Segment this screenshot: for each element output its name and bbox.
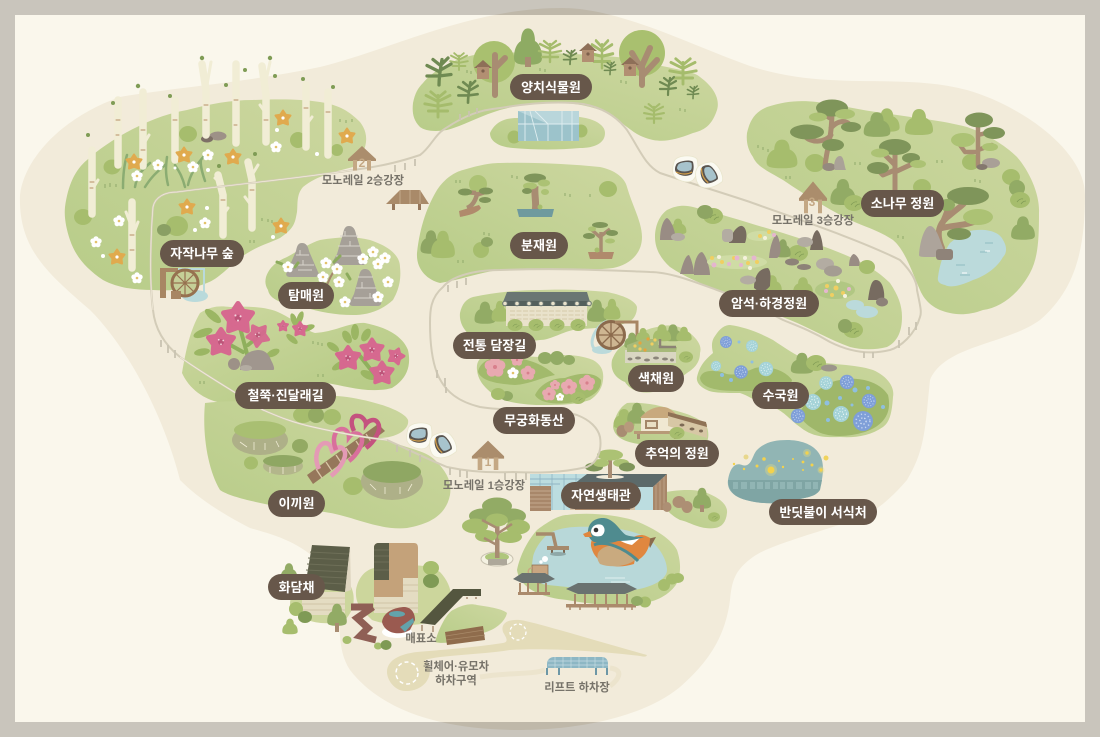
hydrangea blooms [720,336,732,348]
ferns [427,58,451,85]
grass ticks [200,341,323,384]
text: wheelchair and stroller drop-off [423,659,490,687]
monorail station 3: 모노레일 3승강장 [772,213,855,227]
pine bushes [767,108,1020,195]
label: rose of sharon hill: 무궁화동산 [504,413,564,428]
panel: plum garden [265,226,400,315]
text: wheelchair and stroller drop-off: 하차구역 [435,674,477,687]
panel: bonsai garden [417,163,642,283]
monorail station 1: 1 [485,455,492,469]
label: azalea road: 철쭉·진달래길 [247,388,324,403]
birdhouses [474,60,492,79]
monorail track [151,103,921,480]
label: colour garden: 색채원 [638,371,674,386]
rest pavilion [386,190,429,210]
broadleaf trees [473,28,665,95]
ticket office [382,607,415,638]
birch trunks [92,62,328,268]
brick zigzag path [351,607,376,640]
panel: rock and summer garden [655,205,902,349]
lift platform [547,657,608,675]
pond bushes [639,573,684,608]
bonsai two [517,174,554,217]
bushes [74,126,343,236]
thatched house [634,407,707,439]
monorail station 1: 모노레일 1승강장 [443,478,526,492]
stone towers [286,226,381,306]
monorail trains upper [673,156,725,192]
mandarin duck [583,518,656,582]
label: firefly habitat [769,499,877,525]
track posts [161,108,916,393]
mauve rocks [660,218,860,275]
label: birch forest: 자작나무 숲 [170,246,234,261]
tiered flower bed [625,337,677,363]
monorail station 3 [772,181,855,227]
white flowers [90,141,282,283]
monorail station 2: 모노레일 2승강장 [322,173,405,187]
left building [302,545,351,615]
label: pine garden: 소나무 정원 [871,196,934,211]
wood deck [445,626,485,645]
panel: fern garden [413,28,718,141]
pond [938,230,1006,286]
grey rocks [671,229,842,284]
panel: greenhouse [490,111,605,150]
label: rock and summer garden: 암석·하경정원 [731,296,807,311]
label: fern garden: 양치식물원 [521,80,581,95]
birch leaves [86,56,335,168]
watermill [592,322,637,354]
moss bushes [244,407,363,495]
label: hydrangea garden [752,382,809,409]
ecology centre building [530,450,667,511]
monorail station 3: 3 [809,195,816,209]
label: hwadamchae [268,574,325,600]
label: hanok wall road: 전통 담장길 [463,338,526,353]
pavilion small [513,573,555,595]
pine trees [805,110,992,248]
pond water [532,527,667,591]
label: moss garden [268,490,325,517]
label: plum garden: 탐매원 [288,288,324,303]
label: hydrangea garden: 수국원 [763,388,798,403]
greenhouse building [518,111,579,141]
panel: ecology centre grounds [530,450,727,528]
bottom drop-off area [387,589,647,691]
label: firefly habitat: 반딧불이 서식처 [779,505,867,520]
grass ticks [456,175,590,263]
pine rocks [822,156,1000,260]
panel: hwadamchae buildings [281,543,451,650]
water wheel [160,268,208,302]
heart bridge [307,416,385,484]
grass ticks [758,145,980,239]
panel: azalea road [182,304,409,403]
drop-off road [387,620,647,691]
panel: moss garden [204,396,450,528]
panel: firefly habitat [728,440,828,503]
label: moss garden: 이끼원 [279,496,314,511]
label: memory garden: 추억의 정원 [645,446,709,461]
panel: hydrangea garden [697,325,893,437]
azalea rocks [240,350,274,370]
small pond [846,300,864,310]
building trees and bushes [281,561,439,650]
orange flowers [276,110,290,124]
text: wheelchair and stroller drop-off: 휠체어·유모차 [423,659,490,673]
azalea leaves [192,307,377,382]
rocks [210,132,226,140]
azalea flowers [208,304,406,382]
faint path to lift [480,668,619,686]
label: bonsai garden [510,232,568,259]
grass ticks [467,68,685,112]
label: ecology centre: 자연생태관 [571,488,631,503]
bark marks [90,100,330,250]
label: rock and summer garden [719,290,819,317]
monorail station 2 [322,146,405,187]
fireflies [733,449,828,476]
jetty [536,534,556,547]
bonsai one [458,175,493,217]
monorail station 1 [443,441,526,492]
pavilion large [566,583,637,610]
label: fern garden [510,74,592,100]
panel: mandarin duck pond [513,514,684,610]
garden trees [624,324,682,348]
monorail station 2: 2 [359,156,366,170]
garden bushes [670,208,875,338]
panel: memory garden [613,403,708,446]
stone wall with tile roof [503,292,591,326]
wall back bushes [474,300,607,324]
label: bonsai garden: 분재원 [521,238,557,253]
text: lift drop-off: 리프트 하차장 [544,681,610,694]
big pine tree [462,498,530,566]
panel: rose of sharon hill [477,351,603,405]
moss stone rings [232,421,423,500]
panel: pine garden [747,100,1039,314]
jars [616,425,628,437]
bonsai bushes [473,181,617,258]
label: pine garden [861,190,944,217]
label: hwadamchae: 화담채 [279,580,314,595]
text: ticket office: 매표소 [405,631,437,645]
label: plum garden [278,282,334,309]
label: ecology centre [561,482,641,509]
label: azalea road [235,382,336,409]
label: rose of sharon hill [493,407,575,434]
panel: birch forest [65,56,366,302]
flower beds [707,230,855,299]
pink flowers [485,356,505,377]
panel: colour garden [592,322,701,393]
clay pots [662,496,692,513]
label: birch forest [160,240,244,267]
grass ticks [105,119,352,243]
coffee cup [528,556,548,583]
label: memory garden [635,440,719,467]
label: hanok wall road [453,332,536,359]
dark rocks [729,226,884,300]
monorail trains lower [407,423,459,462]
grass blades [123,155,205,188]
label: colour garden [628,365,684,392]
dark walkway [420,589,481,625]
bonsai three [583,222,618,259]
small lawn [435,604,507,643]
panel: hanok wall road [460,290,637,342]
right building [374,543,418,613]
